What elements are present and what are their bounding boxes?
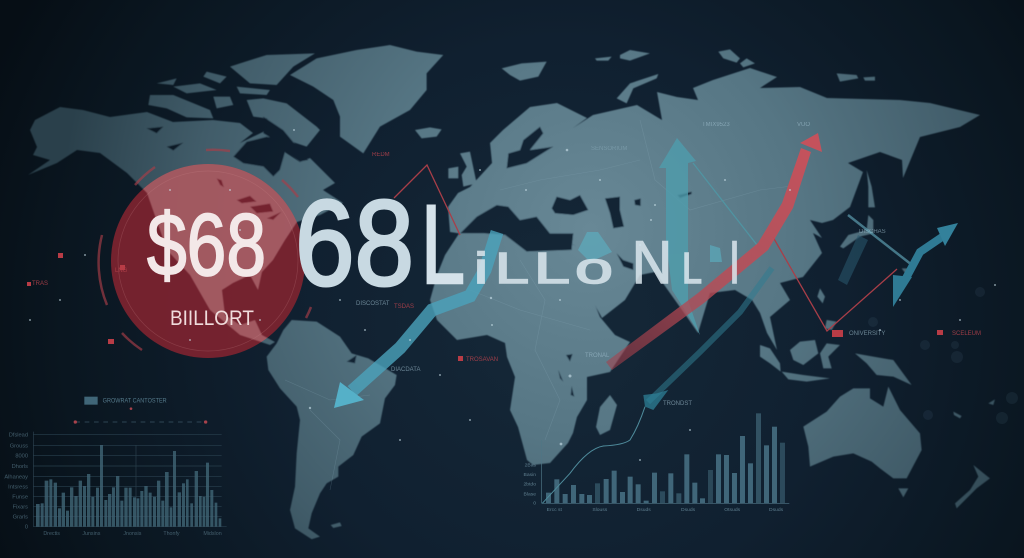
x axis labels: Dsuds bbox=[681, 507, 696, 513]
y axis labels: Intsress bbox=[8, 485, 28, 491]
chart legend bbox=[84, 397, 167, 405]
x axis labels: Drectis bbox=[43, 531, 60, 537]
headline: broken word: L bbox=[682, 244, 702, 293]
chart grid bbox=[33, 432, 227, 527]
map labels: TMIX9523 bbox=[702, 122, 730, 128]
map labels: DISCHAS bbox=[859, 229, 886, 235]
x axis labels: Ercc st bbox=[547, 507, 563, 513]
y axis labels bbox=[4, 433, 28, 531]
y axis labels: 2btdo bbox=[524, 482, 536, 488]
red map labels: TSDAS bbox=[394, 304, 414, 310]
y axis labels: Grarls bbox=[13, 515, 28, 521]
country borders bbox=[285, 120, 800, 490]
chart axes bbox=[542, 440, 789, 503]
red map labels: TROSAVAN bbox=[466, 357, 498, 363]
headline: 68: 68 bbox=[295, 175, 414, 311]
x axis labels: Thonfy bbox=[163, 531, 180, 537]
red map labels: LNG bbox=[115, 268, 128, 274]
red connector lines bbox=[394, 165, 897, 331]
headline: broken word: L bbox=[534, 244, 570, 293]
y axis labels bbox=[524, 463, 536, 507]
y axis labels: Basin bbox=[524, 472, 536, 478]
x axis labels: Junsins bbox=[82, 531, 101, 537]
map labels: SENSORIUM bbox=[591, 146, 627, 152]
x axis labels: Dsuds bbox=[769, 507, 784, 513]
y axis labels: Dfslead bbox=[9, 433, 28, 439]
map labels: TRONAL bbox=[585, 353, 610, 359]
y axis labels: Dhorls bbox=[12, 464, 28, 470]
red circle callout bbox=[111, 164, 305, 358]
x axis labels bbox=[43, 531, 222, 537]
headline: $68: $68 bbox=[147, 195, 266, 294]
y axis labels: 0 bbox=[25, 525, 28, 531]
x axis labels bbox=[547, 507, 784, 513]
y axis labels: 0 bbox=[533, 501, 536, 507]
y axis labels: Grouss bbox=[10, 443, 28, 449]
x axis labels: Dsuds bbox=[637, 507, 651, 513]
map labels bbox=[356, 122, 886, 407]
headline: broken word: o bbox=[575, 244, 613, 293]
map labels: ONIVERSITY bbox=[849, 331, 885, 337]
arrow: teal route to Indian Ocean bbox=[648, 268, 772, 402]
headline: L: L bbox=[421, 182, 465, 307]
y axis labels: Alhaneay bbox=[4, 474, 28, 480]
red map labels: TRAS bbox=[32, 281, 48, 287]
headline: broken word: i bbox=[474, 244, 488, 293]
teal patches on Middle East bbox=[578, 232, 722, 262]
ocean glow spots bbox=[868, 287, 1018, 424]
legend dashed timeline bbox=[74, 407, 207, 424]
y axis labels: Fixars bbox=[13, 505, 28, 511]
trend line bbox=[542, 407, 645, 503]
chart legend: GROWRAT CANTOSTER bbox=[103, 399, 167, 405]
headline: broken word: I bbox=[729, 229, 740, 296]
y axis labels: 8000 bbox=[15, 454, 28, 460]
red map labels: SCELEUM bbox=[952, 331, 981, 337]
map labels: DIACDATA bbox=[391, 367, 420, 373]
bars bbox=[546, 413, 785, 503]
red rising arrow bbox=[606, 133, 822, 370]
headline: broken word: L bbox=[495, 244, 529, 293]
node patch bbox=[643, 390, 668, 410]
left bar chart bbox=[4, 397, 227, 537]
blue arrow: to South America bbox=[334, 232, 497, 408]
map labels: DISCOSTAT bbox=[356, 301, 390, 307]
red map markers bbox=[27, 253, 943, 361]
headline: broken word: N bbox=[632, 229, 672, 296]
right bar chart bbox=[524, 390, 789, 513]
red map labels: REDM bbox=[372, 152, 390, 158]
map labels: TRONDST bbox=[663, 401, 692, 407]
teal arrow: up over Asia bbox=[659, 138, 757, 335]
bars bbox=[36, 445, 221, 527]
y axis labels: Blase bbox=[524, 491, 536, 497]
y axis labels: 2Bas bbox=[525, 463, 536, 469]
x axis labels: Slouss bbox=[592, 507, 608, 513]
x axis labels: Jnonsis bbox=[123, 531, 142, 537]
y axis labels: Funse bbox=[12, 495, 28, 501]
map labels: VUO bbox=[797, 122, 810, 128]
arrows: western Pacific bbox=[838, 215, 958, 307]
circle label: BIILLORT bbox=[170, 307, 254, 330]
red map labels bbox=[32, 152, 981, 363]
circle outer ring segments bbox=[99, 150, 311, 350]
x axis labels: Midslon bbox=[203, 531, 222, 537]
x axis labels: Otsuds bbox=[724, 507, 741, 513]
scattered data dots bbox=[29, 129, 996, 461]
headline: broken word bbox=[474, 229, 740, 296]
